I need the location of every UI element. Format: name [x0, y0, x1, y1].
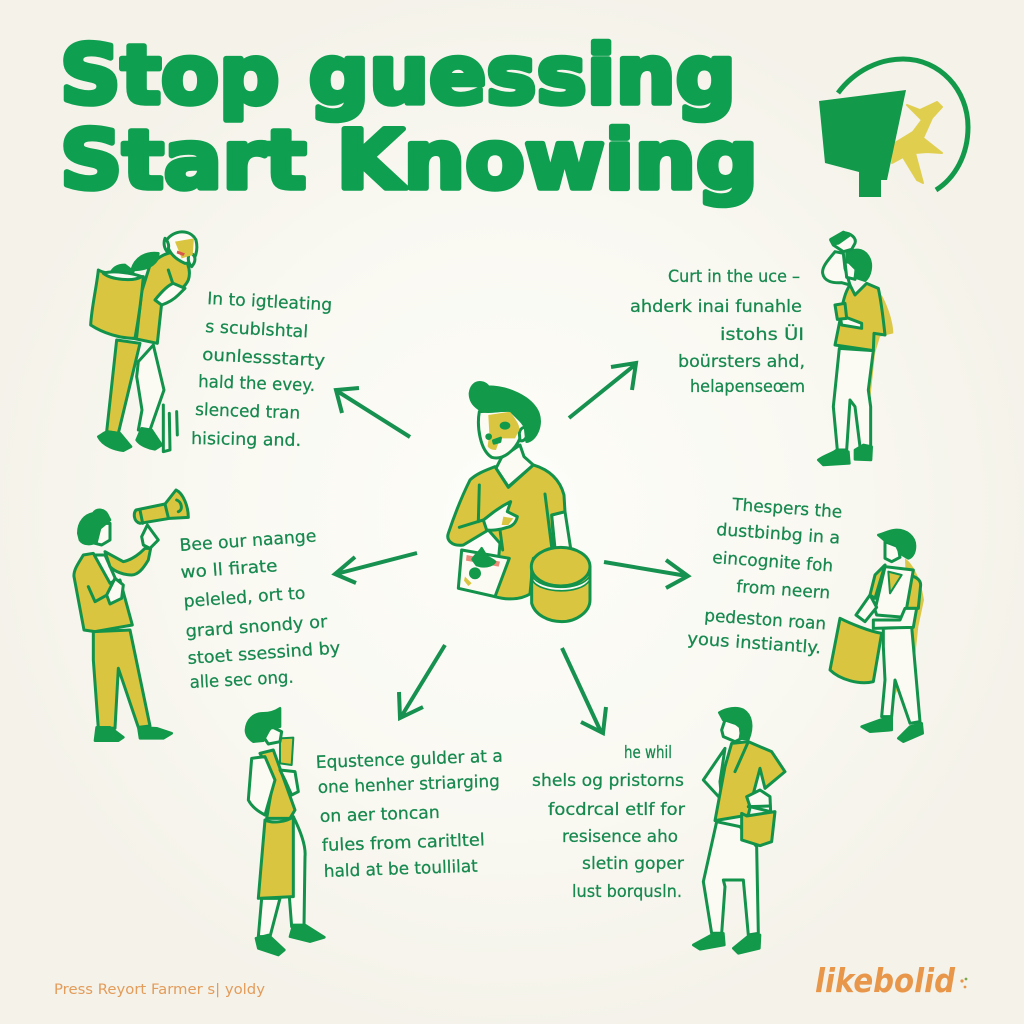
text block: lower right	[532, 743, 685, 902]
text block: upper right	[630, 267, 805, 397]
text block: middle right: Thespers the	[731, 495, 843, 523]
text block: middle left: alle sec ong.	[189, 668, 294, 693]
text block: upper left: slenced tran	[195, 400, 300, 424]
text block: lower right: shels og pristorns	[532, 771, 684, 791]
text block: lower left: fules from caritltel	[321, 830, 485, 856]
text block: upper right: istohs ÜI	[720, 323, 804, 345]
text block: middle left	[179, 526, 341, 693]
arrow: to lower left	[399, 645, 445, 718]
text block: middle left: Bee our naange	[179, 526, 317, 556]
text block: middle right: from neern	[736, 577, 831, 604]
text block: lower left: Equstence gulder at a	[315, 746, 503, 773]
arrow: to middle left	[335, 553, 417, 583]
footer note: Press Reyort Farmer s| yoldy	[54, 982, 265, 998]
text block: lower left: one henher striarging	[317, 772, 500, 798]
text block: middle right	[687, 495, 843, 658]
figure: central person with card and pot	[448, 382, 590, 622]
text block: upper left: s scublshtal	[205, 317, 309, 342]
text block: middle right: eincognite foh	[712, 548, 834, 576]
arrow: to middle right	[604, 560, 688, 588]
text block: upper left: hisicing and.	[191, 429, 301, 451]
text block: middle left: peleled, ort to	[183, 584, 306, 612]
text block: lower right: sletin goper	[582, 854, 684, 874]
text block: upper right: ahderk inai funahle	[630, 297, 802, 317]
text block: upper right: helapenseœm	[690, 377, 805, 397]
text block: upper left: In to igtleating	[207, 289, 333, 316]
text block: middle left: grard snondy or	[185, 612, 328, 642]
text block: upper left: hald the evey.	[198, 372, 315, 396]
title: Stop guessing	[60, 29, 736, 123]
text block: middle left: stoet ssessind by	[187, 638, 341, 669]
text block: upper left: ounlessstarty	[202, 345, 326, 371]
text block: lower right: lust borqusln.	[572, 882, 682, 902]
title	[60, 29, 758, 208]
figure: person holding drum	[830, 530, 924, 742]
brand logo: likebolid	[815, 961, 955, 1000]
figure: person in skirt with book	[246, 708, 324, 955]
text block: middle right: yous instiantly.	[687, 629, 822, 658]
figure: person with shoulder bag	[693, 708, 785, 953]
text block: lower right: focdrcal etlf for	[548, 800, 685, 820]
icon: logo badge	[819, 59, 968, 197]
text block: lower right: he whil	[624, 743, 672, 763]
text block: upper right: boürsters ahd,	[678, 352, 805, 372]
arrow: to upper left	[336, 388, 410, 437]
text block: lower left: hald at be toullilat	[323, 857, 478, 882]
arrow: to lower right	[562, 648, 606, 733]
title: Start Knowing	[60, 114, 758, 208]
arrow: to upper right	[569, 363, 636, 418]
text block: upper right: Curt in the uce –	[668, 267, 800, 287]
figure: person with megaphone	[74, 490, 188, 741]
text block: middle left: wo ll firate	[180, 556, 278, 583]
text block: lower left	[315, 746, 503, 882]
text block: upper left	[191, 289, 333, 451]
text block: lower left: on aer toncan	[319, 803, 440, 827]
figure: person with raised hand	[818, 232, 893, 465]
text block: middle right: pedeston roan	[704, 606, 827, 634]
text block: middle right: dustbinbg in a	[716, 520, 841, 549]
text block: lower right: resisence aho	[562, 827, 678, 847]
figure: person carrying basket	[91, 232, 197, 452]
